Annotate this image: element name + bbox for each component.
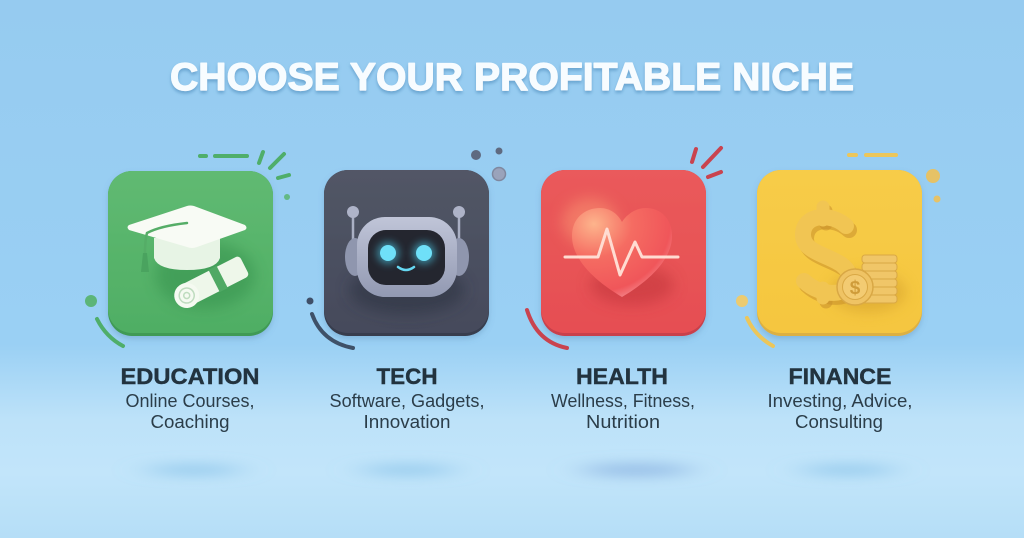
label: health: Wellness, Fitness,	[551, 390, 695, 411]
label: health: Nutrition	[586, 411, 660, 432]
card: education	[108, 171, 273, 336]
label: education: Coaching	[150, 411, 230, 432]
accents: finance	[736, 155, 940, 346]
icon: robot	[345, 206, 469, 314]
label: education	[120, 364, 260, 432]
label: tech: Software, Gadgets,	[330, 390, 484, 411]
icon: dollar and coins: $	[850, 278, 861, 299]
accents: tech	[306, 148, 506, 348]
label: health	[551, 364, 695, 432]
label: finance: FINANCE	[788, 364, 892, 389]
icon: graduation cap and diploma	[128, 206, 255, 312]
icon: heart with pulse	[562, 198, 678, 305]
label: finance: Consulting	[795, 411, 883, 432]
floor shadows	[146, 463, 896, 477]
panel: finance	[736, 155, 940, 432]
panel: health	[527, 148, 721, 432]
card: finance	[757, 170, 922, 336]
label: finance	[768, 364, 912, 432]
label: finance: Investing, Advice,	[768, 390, 912, 411]
label: health: HEALTH	[576, 364, 668, 389]
label: tech: TECH	[376, 364, 438, 389]
label: education: Online Courses,	[126, 390, 254, 411]
label: education: EDUCATION	[120, 364, 260, 389]
card: health	[541, 170, 706, 336]
title: CHOOSE YOUR PROFITABLE NICHE	[170, 56, 854, 99]
panel: education	[85, 152, 290, 432]
accents: health	[527, 148, 721, 348]
label: tech: Innovation	[364, 411, 450, 432]
panel: tech	[306, 148, 506, 432]
icon: dollar and coins	[803, 207, 906, 312]
card: tech	[324, 170, 489, 336]
accents: education	[85, 152, 290, 346]
label: tech	[330, 364, 484, 432]
